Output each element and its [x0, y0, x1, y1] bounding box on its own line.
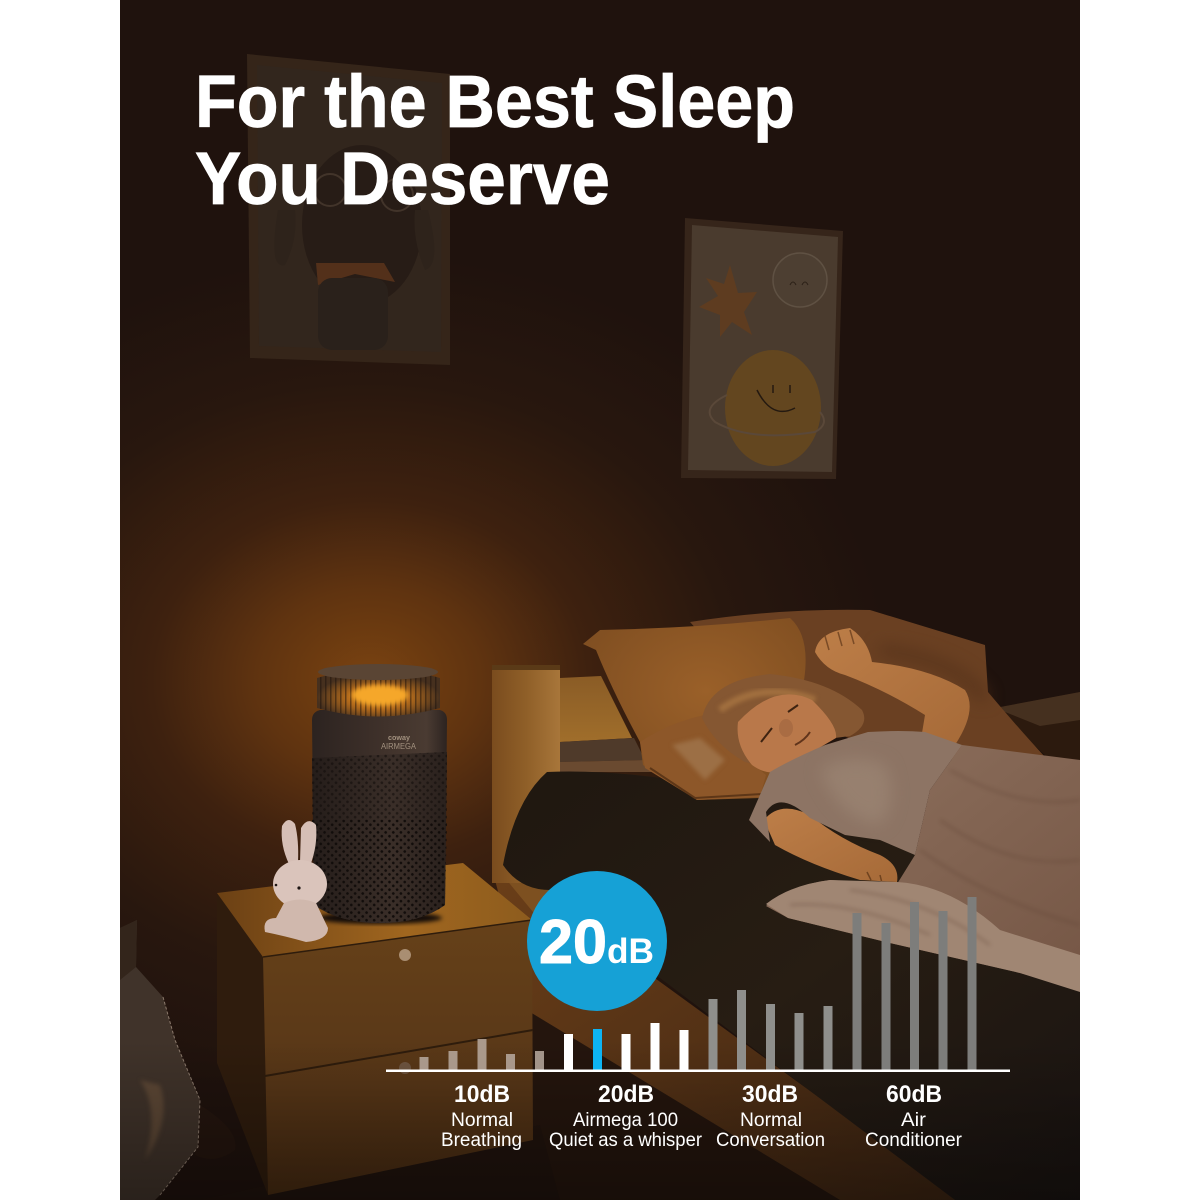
label: 10dB normal breathing [441, 1081, 522, 1151]
child lower arm and hand [764, 809, 897, 883]
child raised arm [815, 628, 970, 745]
back blanket behind the pillow [690, 610, 1045, 760]
label: 60dB air conditioner: Air [901, 1110, 927, 1131]
label: 60dB air conditioner [865, 1081, 963, 1151]
label: 60dB air conditioner: 60dB [886, 1081, 942, 1108]
child face [738, 694, 836, 772]
brand logo [381, 736, 416, 749]
title [195, 60, 795, 220]
bedroom wall [120, 0, 1080, 1200]
label: 30dB normal conversation: Conversation [716, 1130, 825, 1151]
drawer knob [399, 949, 411, 961]
child t-shirt [749, 731, 962, 855]
air purifier [312, 664, 447, 924]
60dB bars [852, 897, 976, 1070]
dark bed sheet [503, 772, 987, 1200]
label: 10dB normal breathing: 10dB [454, 1081, 510, 1108]
label: 30dB normal conversation [716, 1081, 825, 1151]
noise level badge: 20dB [527, 871, 667, 1011]
side table behind bed [995, 692, 1080, 760]
20dB bars with the Airmega 100 highlighted [564, 1023, 688, 1070]
label: 10dB normal breathing: Normal [451, 1110, 513, 1131]
child hair [702, 674, 864, 770]
30dB bars [708, 990, 832, 1070]
quilted blanket [766, 745, 1080, 992]
10dB bars [420, 1039, 544, 1070]
label: 60dB air conditioner: Conditioner [865, 1130, 963, 1151]
framed poster: star, moon and planet [681, 218, 843, 479]
label: 20dB Airmega 100: Airmega 100 [573, 1110, 678, 1131]
noise level badge: 20dB: 20 [539, 908, 607, 977]
brand logo: AIRMEGA [381, 741, 416, 751]
noise level bar chart [386, 897, 1010, 1072]
photo: child sleeping in a dim bedroom with the air purifier [120, 0, 1080, 1200]
label: 30dB normal conversation: 30dB [742, 1081, 798, 1108]
bed headboard [492, 665, 652, 883]
chart baseline [386, 1070, 1010, 1072]
label: 20dB Airmega 100 [549, 1081, 703, 1151]
nightstand [217, 863, 533, 1195]
stuffed toy silhouette in the corner [120, 920, 200, 1200]
noise level badge: 20dB: dB [607, 932, 654, 971]
title: For the Best Sleep [195, 60, 795, 143]
label: 20dB Airmega 100: 20dB [598, 1081, 654, 1108]
amber glass cap [317, 676, 440, 716]
title: You Deserve [195, 137, 610, 220]
lower photo shading [120, 1068, 1080, 1200]
label: 20dB Airmega 100: Quiet as a whisper [549, 1130, 703, 1151]
bed rail and floor [496, 883, 954, 1200]
brand logo: coway [388, 735, 410, 742]
label: 30dB normal conversation: Normal [740, 1110, 802, 1131]
framed poster: owl rabbit [247, 54, 450, 365]
white rabbit figurine [264, 820, 328, 942]
pillow [583, 618, 806, 800]
label: 10dB normal breathing: Breathing [441, 1130, 522, 1151]
infographic canvas [120, 0, 1080, 1200]
